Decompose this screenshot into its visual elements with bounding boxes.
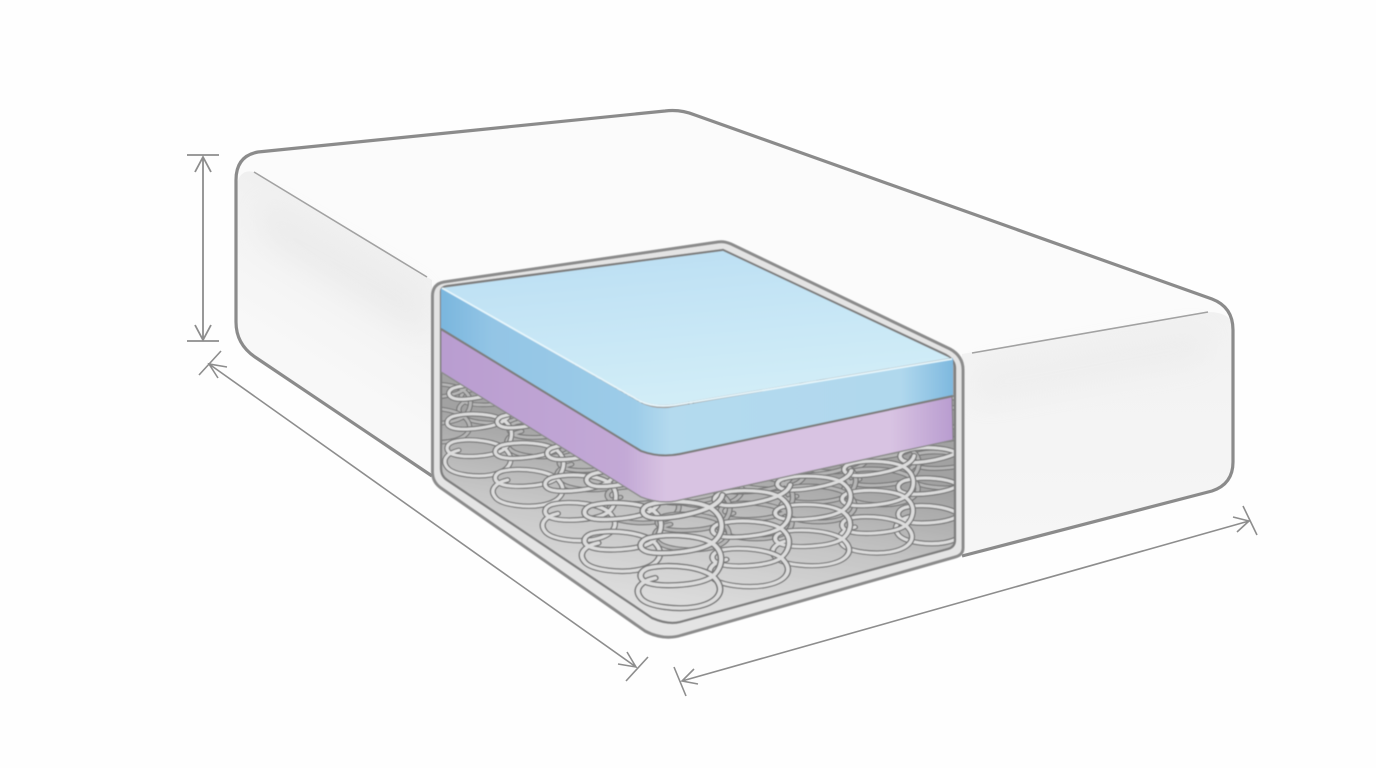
- right seam line: [972, 312, 1208, 353]
- dimension: height arrow: [187, 155, 219, 341]
- dimension: width arrow: [674, 506, 1257, 696]
- innerspring coils: [442, 382, 954, 612]
- blue and purple divider line: [441, 329, 953, 455]
- left seam line: [254, 172, 427, 277]
- mattress body: [236, 110, 1233, 556]
- mattress top face: [236, 110, 1233, 480]
- spring cavity: [441, 250, 955, 623]
- cavity inner outline: [441, 250, 955, 623]
- blue foam layer top: [442, 251, 950, 405]
- soft shading under the seams: [262, 200, 1205, 402]
- blue top front highlight: [442, 288, 952, 406]
- dimension: depth arrow: [199, 351, 648, 681]
- purple bottom line: [441, 372, 953, 502]
- mattress left side face: [236, 171, 432, 478]
- cutout frame: [432, 242, 963, 637]
- mattress outline: [236, 110, 1233, 556]
- blue foam layer side: [441, 288, 953, 455]
- cutaway section: [404, 242, 981, 637]
- illustration: mattress cutaway with dimension arrows: [187, 108, 1258, 696]
- purple foam layer: [441, 328, 953, 502]
- mattress right side face: [962, 312, 1233, 556]
